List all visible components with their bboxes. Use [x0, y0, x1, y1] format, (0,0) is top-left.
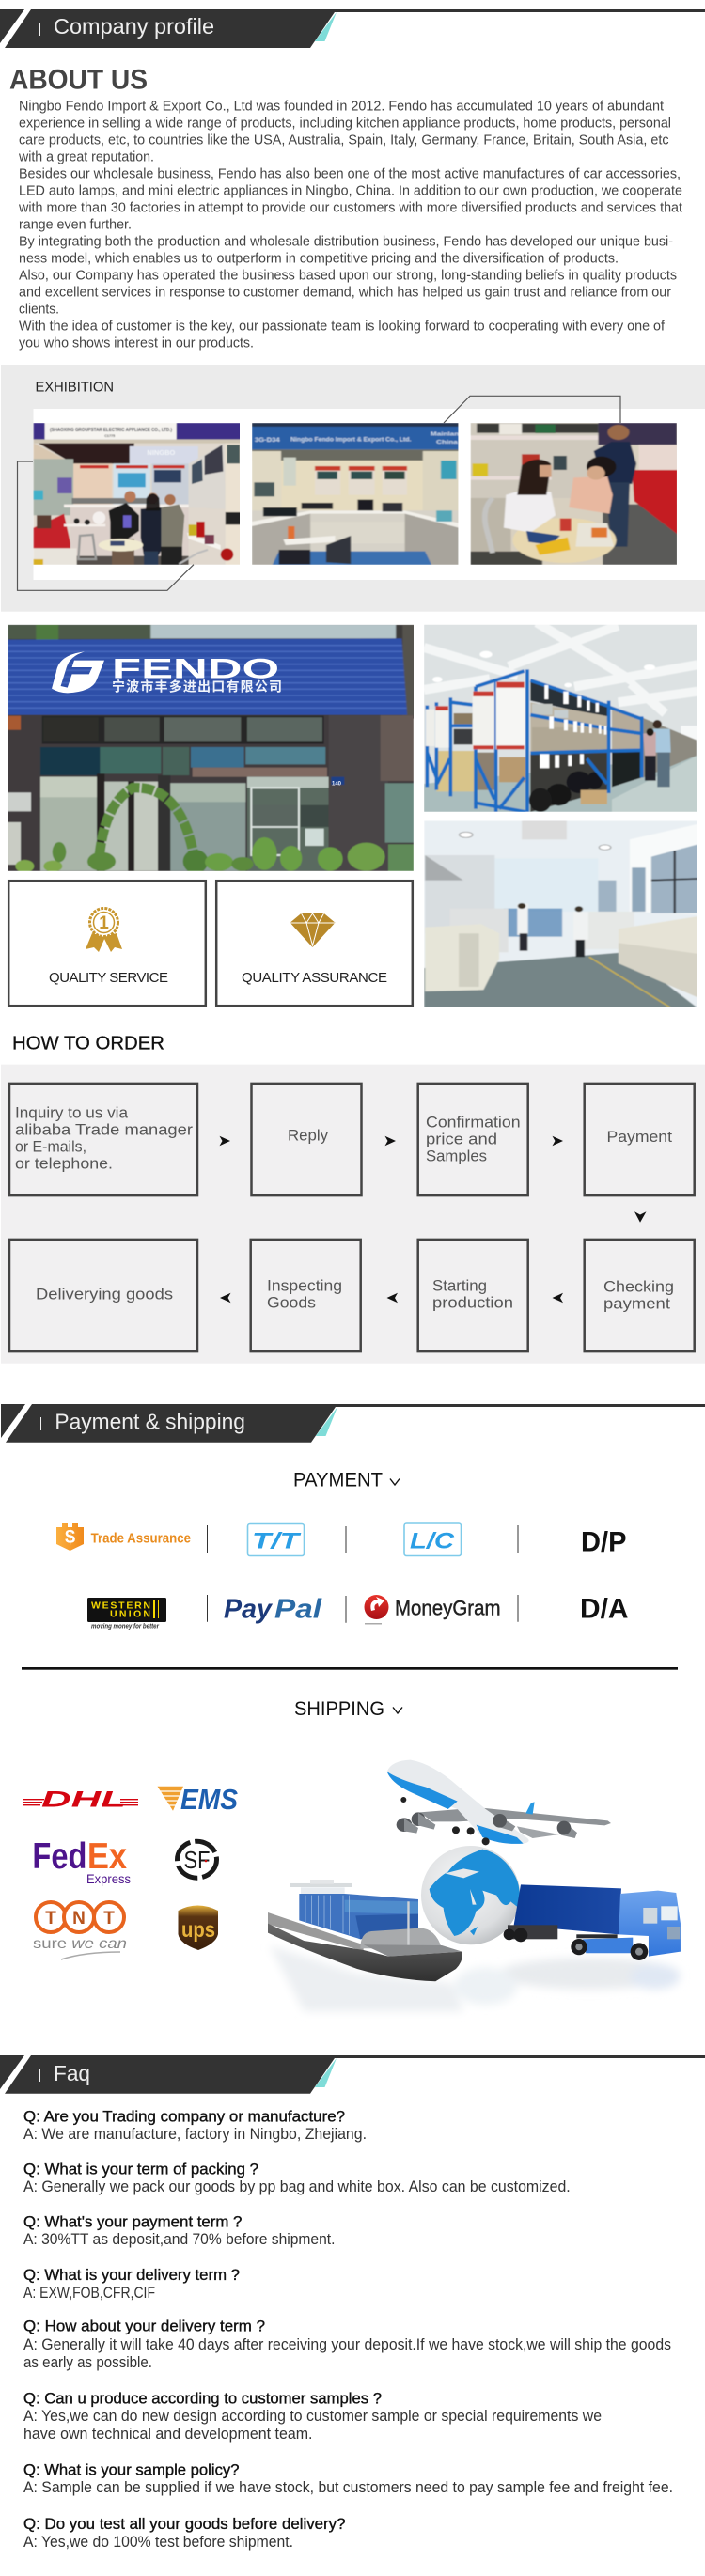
step: inquiry: Inquiry to us via: [15, 1104, 129, 1121]
step: checking payment: Checking: [603, 1278, 674, 1295]
logo: PayPal: Pal: [274, 1595, 322, 1625]
faq item 2: [24, 2161, 571, 2195]
photo: exhibition booth with three people: (SHAOXING GROUPSTAR ELECTRIC APPLIANCE CO., LTD.): [50, 428, 172, 433]
plane: [387, 1760, 611, 1845]
text block: company introduction: clients.: [19, 302, 59, 317]
logo: Trade Assurance: $: [65, 1527, 75, 1548]
photo: exhibition booth with three people: C1775: [104, 434, 115, 438]
step: confirmation: price and: [426, 1131, 497, 1147]
text block: company introduction: LED auto lamps, and mini electric appliances in Ningbo, China. In addition to our own production, we cooperate: [19, 183, 682, 198]
step: reply: Reply: [288, 1127, 329, 1144]
logo: FENDO sign: [52, 651, 104, 693]
photo: empty Ningbo Fendo exhibition booth: 3G-D34: [255, 436, 280, 444]
text block: company introduction: By integrating both the production and wholesale distribution business, Fendo has developed our unique busi-: [19, 234, 673, 249]
icon: gold diamond: [290, 913, 335, 947]
faq item 2: Q: What is your term of packing ?: [24, 2161, 258, 2178]
arrow right: [220, 1136, 230, 1146]
photo: empty Ningbo Fendo exhibition booth: China: [436, 440, 458, 445]
logo: PayPal: Pay: [224, 1595, 274, 1625]
step: payment: [585, 1084, 695, 1195]
photo: empty Ningbo Fendo exhibition booth: Mainland: [431, 431, 463, 437]
section header: Company profile: [0, 9, 705, 48]
step: confirmation: [418, 1084, 528, 1195]
text block: FAQ: [24, 2108, 673, 2551]
heading: SHIPPING: SHIPPING: [294, 1698, 384, 1720]
arrow right: [553, 1136, 563, 1146]
section header: Company profile: Company profile: [54, 14, 214, 39]
text block: company introduction: you who shows interest in our products.: [19, 336, 254, 351]
section header: Faq: [0, 2055, 705, 2094]
logo: TNT: T: [45, 1909, 56, 1928]
logo: Trade Assurance: [56, 1523, 191, 1551]
logo: Western Union: [87, 1598, 166, 1631]
faq item 5: Q: How about your delivery term ?: [24, 2318, 265, 2335]
photo: exhibition booth with three people: NINGBO: [147, 448, 176, 457]
label: D/P: D/P: [581, 1526, 626, 1557]
photo: company building with FENDO sign: FENDO: [112, 654, 279, 685]
logo: DHL: [24, 1788, 138, 1813]
arrow down: [634, 1211, 647, 1223]
section header: Faq: Faq: [54, 2061, 90, 2085]
faq item 8: [24, 2516, 346, 2551]
photo: empty Ningbo Fendo exhibition booth: Ningbo Fendo Import & Export Co., Ltd.: [290, 436, 411, 443]
faq item 4: A: EXW,FOB,CFR,CIF: [24, 2285, 155, 2302]
callout frame: bracket lines around exhibition photos: [17, 396, 620, 590]
building entrance: [8, 715, 414, 874]
panel: quality assurance: [216, 881, 413, 1006]
cargo ship: [268, 1880, 462, 1981]
step: inquiry: or E-mails,: [15, 1138, 86, 1155]
logo: Western Union: UNION: [110, 1609, 150, 1620]
step: starting production: Starting: [432, 1277, 487, 1294]
logo: L/C: [404, 1523, 461, 1556]
step: inspecting goods: Goods: [267, 1294, 316, 1311]
text block: company introduction: [18, 99, 682, 351]
icon: gold medal: 1: [99, 913, 109, 933]
text block: company introduction: range even further.: [19, 217, 132, 232]
payment dividers: [207, 1525, 518, 1623]
logo: FedEx Express: Ex: [87, 1836, 127, 1877]
panel: order flow: [1, 1065, 705, 1364]
text block: company introduction: experience in selling a wide range of products, including kitchen appliance products, home products, personal: [19, 116, 671, 131]
logo: UPS: [179, 1906, 218, 1950]
logo: UPS: ups: [181, 1917, 215, 1942]
faq item 1: A: We are manufacture, factory in Ningbo, Zhejiang.: [24, 2126, 367, 2143]
arrow right: [385, 1136, 396, 1146]
logo: TNT: N: [72, 1909, 86, 1928]
faq item 4: [24, 2267, 240, 2302]
step: delivering goods: Deliverying goods: [36, 1287, 173, 1304]
text block: company introduction: Ningbo Fendo Import & Export Co., Ltd was founded in 2012. Fendo has accumulated 10 years of abundant: [19, 99, 664, 114]
step: inspecting goods: [251, 1240, 361, 1351]
faq item 6: have own technical and development team.: [24, 2426, 312, 2443]
text block: company introduction: Besides our wholesale business, Fendo has also been one of the most active manufactures of car accessories,: [19, 166, 681, 181]
photo: empty Ningbo Fendo exhibition booth: [252, 423, 463, 566]
arrow left: [220, 1293, 231, 1303]
logo: L/C: L/C: [410, 1529, 455, 1554]
faq item 7: Q: What is your sample policy?: [24, 2461, 239, 2478]
logo: MoneyGram: MoneyGram: [395, 1597, 500, 1620]
section header: Payment & shipping: Payment & shipping: [55, 1410, 245, 1434]
logo: EMS: EMS: [180, 1783, 238, 1816]
faq item 4: Q: What is your delivery term ?: [24, 2267, 240, 2284]
step: starting production: [418, 1240, 528, 1351]
step: inquiry: or telephone.: [15, 1155, 113, 1172]
logo: SF Express: SF: [184, 1846, 211, 1874]
text block: company introduction: With the idea of customer is the key, our passionate team is looking forward to cooperating with every one of: [19, 319, 666, 334]
photo: warehouse shelves: [424, 622, 698, 813]
heading: EXHIBITION: EXHIBITION: [36, 380, 114, 396]
step: inquiry: [9, 1084, 197, 1195]
panel: exhibition: [1, 365, 705, 612]
logo: DHL: DHL: [41, 1788, 126, 1813]
logo: PayPal: [224, 1595, 322, 1625]
logo: SF Express: [177, 1841, 216, 1878]
step: confirmation: Samples: [426, 1147, 487, 1164]
step: inspecting goods: Inspecting: [267, 1277, 342, 1294]
faq item 6: Q: Can u produce according to customer samples ?: [24, 2390, 382, 2407]
step: inquiry: alibaba Trade manager: [15, 1121, 194, 1138]
photo: company building with FENDO sign: 宁波市丰多进出口有限公司: [112, 679, 282, 694]
logo: T/T: T/T: [252, 1529, 302, 1554]
text block: company introduction: ness model, which enables us to outperform in competitive pricing and the diversification of products.: [19, 251, 619, 266]
faq item 1: Q: Are you Trading company or manufacture?: [24, 2108, 345, 2125]
heading: PAYMENT: PAYMENT: [293, 1470, 383, 1491]
faq item 3: A: 30%TT as deposit,and 70% before shipment.: [24, 2231, 335, 2248]
truck: [504, 1884, 681, 1960]
text block: company introduction: and excellent services in response to customer demand, which has helped us gain trust and reliance from our: [19, 285, 671, 300]
text block: company introduction: with a great reputation.: [18, 149, 154, 164]
text block: company introduction: with more than 30 factories in attempt to provide our customers with more diversified products and services that: [18, 200, 682, 215]
photo: exhibition booth with three people: [34, 423, 244, 566]
panel: quality service: [8, 881, 206, 1006]
step: reply: [252, 1084, 361, 1195]
floor reflections: [270, 1945, 680, 2011]
faq item 5: as early as possible.: [24, 2354, 152, 2371]
heading: ABOUT US: ABOUT US: [9, 64, 148, 95]
faq item 8: A: Yes,we do 100% test before shipment.: [24, 2534, 293, 2551]
icon: gold medal: [86, 908, 122, 952]
logo: TNT: [33, 1902, 127, 1959]
logo: TNT: sure we can: [33, 1936, 127, 1952]
photo: company building with FENDO sign: [8, 625, 415, 874]
step: payment: Payment: [607, 1129, 672, 1146]
logo: EMS: [157, 1783, 238, 1816]
arrow left: [387, 1293, 398, 1303]
faq item 7: [24, 2461, 673, 2496]
label: QUALITY SERVICE: QUALITY SERVICE: [49, 970, 168, 986]
globe: [421, 1846, 520, 1944]
logo: FedEx Express: Express: [86, 1871, 131, 1886]
logo: TNT: T: [103, 1909, 115, 1928]
label: QUALITY ASSURANCE: QUALITY ASSURANCE: [242, 970, 387, 986]
photo: meeting with customers at booth: [471, 423, 678, 566]
logo: Western Union: moving money for better: [91, 1624, 160, 1631]
faq item 6: [24, 2390, 602, 2443]
section header: Payment & shipping: [1, 1404, 705, 1443]
faq item 5: [24, 2318, 671, 2371]
step: delivering goods: [9, 1240, 197, 1351]
faq item 2: A: Generally we pack our goods by pp bag and white box. Also can be customized.: [24, 2178, 571, 2195]
photo: factory production line: [424, 820, 698, 1008]
faq item 5: A: Generally it will take 40 days after receiving your deposit.If we have stock,we will ship the goods: [24, 2336, 671, 2353]
faq item 1: [24, 2108, 367, 2143]
heading: HOW TO ORDER: HOW TO ORDER: [12, 1034, 164, 1054]
faq item 3: [24, 2213, 335, 2248]
faq item 3: Q: What's your payment term ?: [24, 2213, 242, 2230]
step: checking payment: [585, 1240, 695, 1351]
illustration: plane, globe, ship and truck: [268, 1760, 681, 2011]
photo: company building with FENDO sign: 140: [332, 782, 342, 788]
faq item 6: A: Yes,we can do new design according to customer sample or special requirements we: [24, 2408, 602, 2425]
arrow left: [553, 1293, 563, 1303]
step: confirmation: Confirmation: [426, 1114, 521, 1131]
logo: Trade Assurance: Trade Assurance: [91, 1530, 191, 1546]
text block: company introduction: care products, etc, to countries like the USA, Australia, Spain, Italy, Germany, France, Britain, South Asia, etc: [19, 133, 669, 148]
step: starting production: production: [432, 1294, 513, 1311]
logo: MoneyGram: [365, 1595, 500, 1624]
logo: T/T: [248, 1524, 305, 1556]
logo: FedEx Express: [32, 1836, 131, 1886]
faq item 8: Q: Do you test all your goods before delivery?: [24, 2516, 346, 2533]
label: D/A: D/A: [580, 1593, 628, 1624]
text block: company introduction: Also, our Company has operated the business based upon our strong, long-standing beliefs in quality products: [19, 268, 677, 283]
logo: FedEx Express: Fed: [32, 1836, 86, 1877]
faq item 7: A: Sample can be supplied if we have stock, but customers need to pay sample fee and freight fee.: [24, 2479, 673, 2496]
step: checking payment: payment: [603, 1295, 670, 1312]
logo: Western Union: WESTERN: [91, 1600, 150, 1612]
